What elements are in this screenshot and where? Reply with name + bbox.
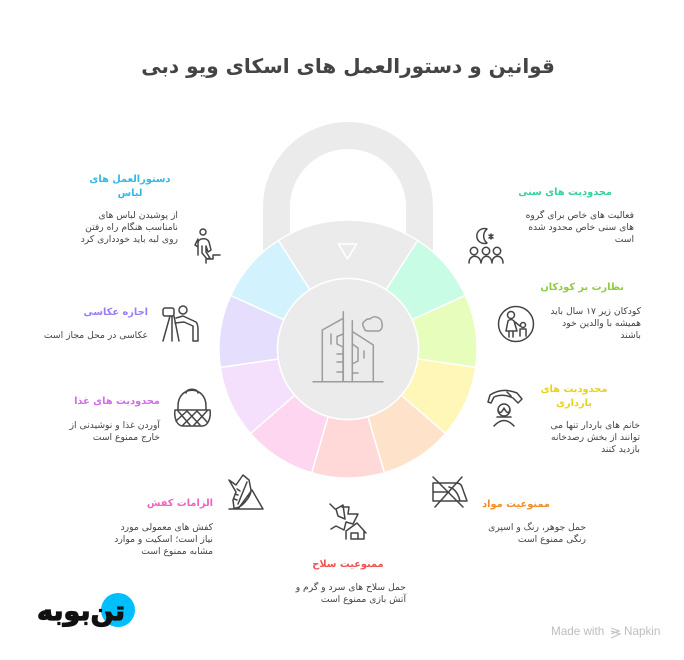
children body: باشند bbox=[620, 330, 641, 341]
pregnancy body: بازدید کنند bbox=[601, 444, 640, 455]
age text bbox=[518, 187, 634, 245]
center hub bbox=[278, 278, 418, 420]
icon: crescent, star and group of people bbox=[469, 228, 503, 263]
pregnancy body bbox=[551, 420, 640, 455]
pregnancy body: توانند از بخش رصدخانه bbox=[551, 432, 640, 443]
materials body: حمل جوهر، رنگ و اسپری bbox=[488, 522, 586, 533]
lock shackle bbox=[263, 122, 433, 262]
icon: crossed out substances bbox=[433, 477, 467, 507]
age heading: محدودیت های سنی bbox=[518, 187, 612, 198]
shoes text bbox=[114, 498, 213, 557]
photography heading: اجازه عکاسی bbox=[83, 307, 148, 318]
pregnancy heading bbox=[541, 384, 607, 409]
materials body: رنگی ممنوع است bbox=[518, 534, 586, 545]
pregnancy text bbox=[541, 384, 640, 455]
made with Napkin: Napkin bbox=[624, 625, 660, 638]
materials body bbox=[488, 522, 586, 545]
icon: clothing walker on stairs bbox=[195, 229, 220, 263]
pregnancy body: خانم های باردار تنها می bbox=[551, 420, 640, 431]
weapons body: حمل سلاح های سرد و گرم و bbox=[296, 582, 406, 593]
segment: photography bbox=[219, 295, 284, 367]
segment: age bbox=[386, 240, 465, 320]
icon: city towers and cloud bbox=[313, 312, 383, 382]
age body bbox=[526, 210, 634, 245]
age body: است bbox=[615, 234, 634, 245]
weapons body bbox=[295, 582, 406, 605]
food body bbox=[69, 419, 160, 443]
segment: weapons bbox=[312, 417, 384, 478]
clothing heading bbox=[89, 174, 171, 199]
food heading: محدودیت های غذا bbox=[74, 396, 160, 407]
icon: Napkin mark bbox=[611, 628, 620, 638]
icons bbox=[163, 228, 534, 539]
shoes heading: الزامات کفش bbox=[147, 498, 213, 509]
children text bbox=[540, 282, 641, 341]
segment: pregnancy bbox=[401, 359, 476, 434]
children body: کودکان زیر ۱۷ سال باید bbox=[550, 306, 641, 317]
clothing heading: دستورالعمل های bbox=[89, 174, 171, 185]
made with Napkin: Made with bbox=[551, 625, 604, 638]
padlock diagram bbox=[219, 122, 477, 478]
weapons text bbox=[295, 559, 406, 605]
children body: همیشه با والدین خود bbox=[562, 318, 641, 329]
photography body: عکاسی در محل مجاز است bbox=[44, 330, 148, 341]
icon: food basket bbox=[175, 389, 210, 426]
segment: food bbox=[220, 359, 295, 434]
age body: های سنی خاص محدود شده bbox=[528, 222, 634, 233]
logo: blue circle bbox=[101, 593, 135, 627]
segment: children bbox=[412, 295, 477, 367]
clothing body bbox=[81, 210, 178, 245]
icon: pregnant woman under arch bbox=[488, 390, 522, 426]
clothing body: از پوشیدن لباس های bbox=[98, 210, 178, 221]
materials text bbox=[482, 499, 586, 545]
segment: clothing bbox=[231, 240, 310, 320]
food body: خارج ممنوع است bbox=[93, 432, 160, 443]
children body bbox=[550, 306, 641, 341]
clothing text bbox=[81, 174, 178, 245]
photography text bbox=[44, 307, 148, 341]
clothing body: روی لبه باید خودداری کرد bbox=[81, 234, 178, 245]
weapons heading: ممنوعیت سلاح bbox=[312, 559, 384, 570]
clothing heading: لباس bbox=[118, 188, 142, 199]
food body: آوردن غذا و نوشیدنی از bbox=[70, 420, 160, 431]
shoes body bbox=[114, 522, 213, 557]
icon: weapon shot at house bbox=[330, 504, 366, 539]
shoes body: کفش های معمولی مورد bbox=[121, 522, 213, 533]
food text bbox=[69, 396, 160, 443]
children heading: نظارت بر کودکان bbox=[540, 282, 624, 293]
segment: materials bbox=[368, 395, 446, 473]
clothing body: نامناسب هنگام راه رفتن bbox=[85, 222, 178, 233]
weapons body: آتش بازی ممنوع است bbox=[321, 594, 406, 605]
age body: فعالیت های خاص برای گروه bbox=[526, 210, 634, 221]
made with Napkin bbox=[551, 625, 660, 638]
triangle marker bbox=[338, 244, 356, 259]
top segment with triangle bbox=[278, 220, 418, 290]
pregnancy heading: محدودیت های bbox=[541, 384, 607, 395]
icon: parent and child in circle bbox=[498, 306, 534, 342]
logo wordmark: تن‌بوبه bbox=[37, 596, 125, 627]
shoes body: نیاز است؛ اسکیت و موارد bbox=[114, 534, 213, 545]
icon: photographer with camera bbox=[163, 306, 198, 341]
pregnancy heading: بارداری bbox=[556, 398, 592, 409]
title: قوانین و دستورالعمل های اسکای ویو دبی bbox=[141, 54, 555, 78]
materials heading: ممنوعیت مواد bbox=[482, 499, 550, 510]
segment: shoes bbox=[250, 395, 328, 473]
shoes body: مشابه ممنوع است bbox=[141, 546, 213, 557]
icon: sneaker on ramp bbox=[229, 475, 263, 509]
